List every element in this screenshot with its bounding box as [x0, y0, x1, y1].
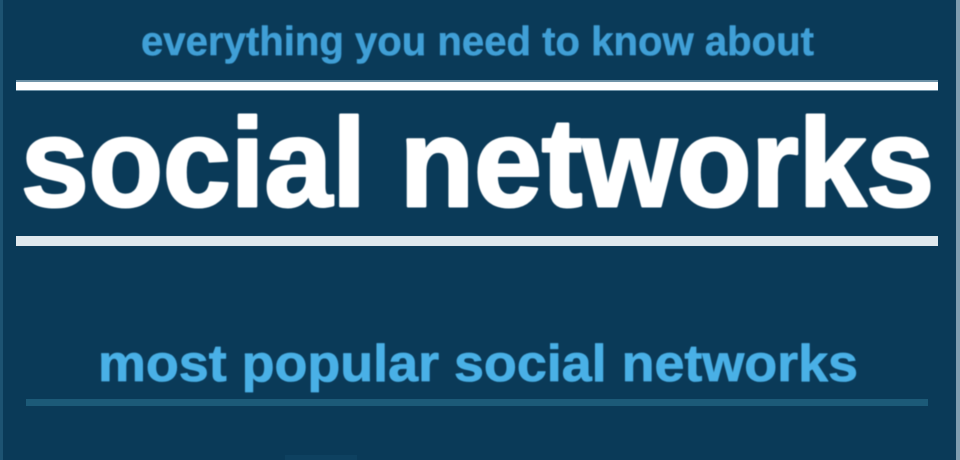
section heading: most popular social networks	[98, 335, 858, 393]
faint cropped artwork at bottom edge	[285, 455, 357, 460]
bottom rule	[16, 236, 938, 246]
subtitle: everything you need to know about	[141, 18, 814, 64]
top rule	[16, 80, 938, 91]
title: social networks	[21, 94, 934, 233]
section rule	[26, 399, 928, 406]
